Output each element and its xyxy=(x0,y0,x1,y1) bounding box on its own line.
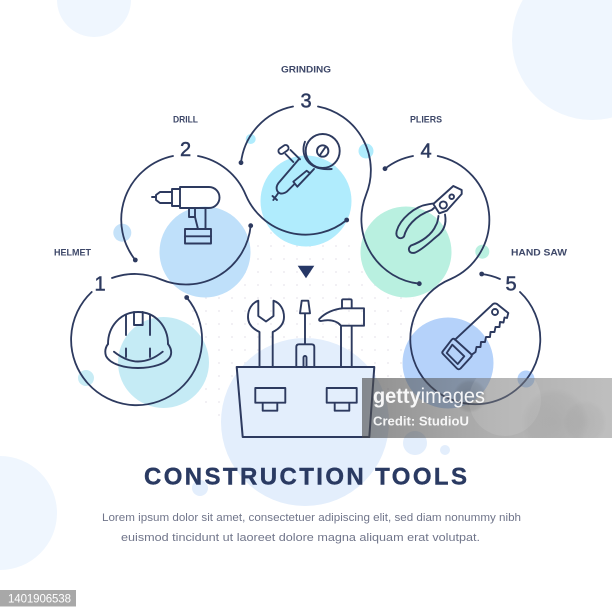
number 1: 1 xyxy=(94,274,106,296)
icon: drill xyxy=(152,187,220,244)
label: helmet: HELMET xyxy=(54,248,91,258)
icon: hand saw xyxy=(442,303,508,369)
image id tag xyxy=(0,590,76,606)
large circle behind toolbox xyxy=(221,338,389,506)
connecting circular flow line xyxy=(71,106,540,405)
title: CONSTRUCTION TOOLS xyxy=(144,464,467,490)
number 5: 5 xyxy=(505,274,517,296)
right latch xyxy=(327,388,357,411)
number 2: 2 xyxy=(180,139,191,161)
watermark band: Credit: StudioU xyxy=(373,414,469,428)
label: grinding: GRINDING xyxy=(281,64,331,76)
icon: toolbox with wrench screwdriver and hammer xyxy=(237,299,374,437)
left latch xyxy=(255,388,285,411)
icon: helmet xyxy=(105,312,171,368)
body text: euismod tincidunt ut laoreet dolore magna aliquam erat volutpat. xyxy=(121,532,480,544)
hammer xyxy=(319,299,364,367)
watermark band: gettyimages xyxy=(373,385,485,408)
watermark band xyxy=(362,364,612,456)
icon: pliers xyxy=(396,186,462,253)
body text: Lorem ipsum dolor sit amet, consectetuer adipiscing elit, sed diam nonummy nibh xyxy=(102,512,521,524)
screwdriver xyxy=(296,301,314,367)
icon: angle grinder xyxy=(272,134,340,200)
label: hand saw: HAND SAW xyxy=(511,248,567,258)
label: pliers: PLIERS xyxy=(410,114,442,126)
arrow pointing to toolbox xyxy=(298,266,314,278)
body text xyxy=(102,512,521,544)
wrench xyxy=(248,301,284,367)
coloured step circles xyxy=(78,134,534,408)
number 3: 3 xyxy=(300,90,312,112)
image id tag: 1401906538 xyxy=(8,594,71,606)
toolbox body xyxy=(237,367,374,437)
number 4: 4 xyxy=(420,140,432,162)
label: drill: DRILL xyxy=(173,114,198,126)
dotted background pattern xyxy=(187,227,423,463)
